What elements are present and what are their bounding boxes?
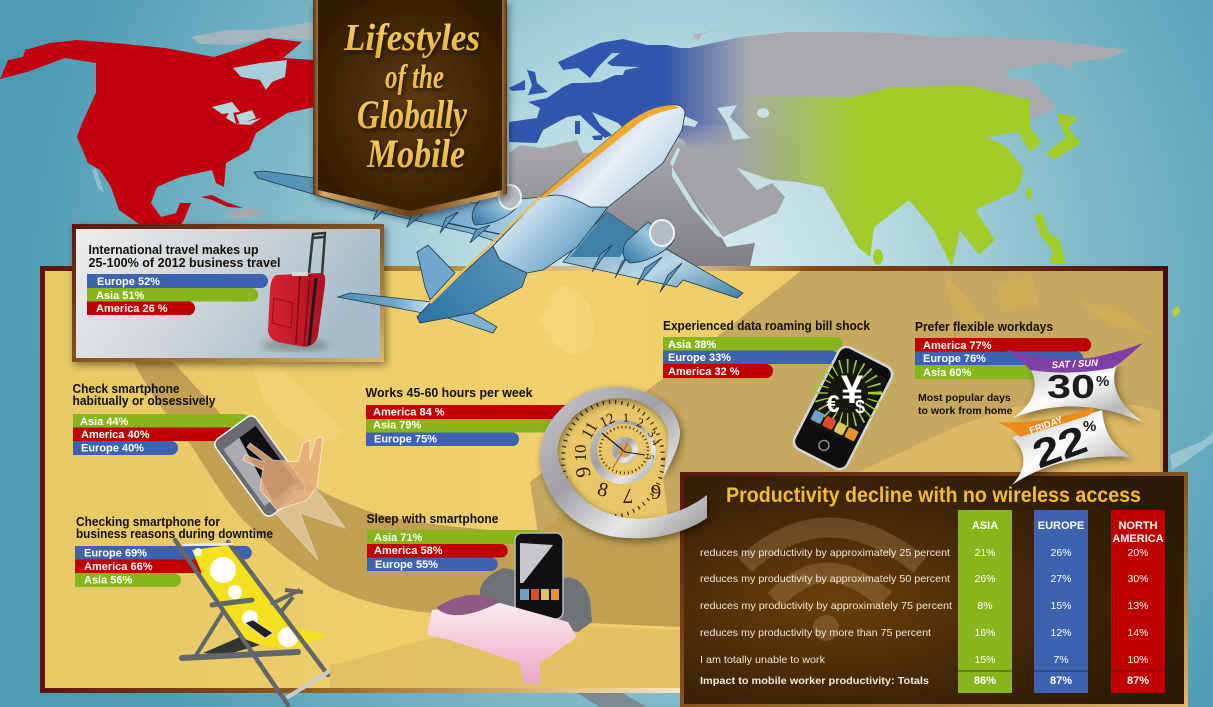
heading: habitually or obsessively xyxy=(72,393,216,408)
bar: Europe 55% xyxy=(367,558,498,571)
illustration: airplane xyxy=(254,105,743,333)
forearm xyxy=(275,490,345,560)
right tailplane xyxy=(445,313,497,333)
currency symbols: ¥ xyxy=(841,368,864,412)
row labels: reduces my productivity by more than 75 percent xyxy=(700,628,931,639)
bar: America 66%: America 66% xyxy=(84,561,153,573)
bar: Europe 76% xyxy=(915,352,1083,365)
map: Cuba xyxy=(201,195,243,208)
bar: Asia 44% xyxy=(73,414,250,428)
bar: America 32%: America 32 % xyxy=(668,366,740,378)
text: most popular days: to work from home xyxy=(918,405,1013,417)
heading block: check smartphone xyxy=(72,381,250,455)
bar: Europe 69% xyxy=(75,546,252,560)
title text: Mobile xyxy=(366,131,465,176)
heading block: prefer flexible workdays xyxy=(915,319,1091,417)
bar: Europe 33% xyxy=(663,350,838,364)
heading: Checking smartphone for xyxy=(76,514,220,529)
heading block: checking during downtime xyxy=(75,514,273,587)
panel: main gold area xyxy=(40,266,1168,693)
bar: America 58%: America 58% xyxy=(374,545,443,557)
bar: Asia 51%: Asia 51% xyxy=(96,290,145,302)
column: North America: NORTH xyxy=(1118,520,1158,532)
map: British Isles xyxy=(509,70,548,95)
chair shadow xyxy=(203,637,260,655)
ribbon label: FRIDAY xyxy=(1028,414,1065,437)
column: Asia: 86% xyxy=(974,675,996,687)
ribbon label: SAT / SUN xyxy=(1051,358,1099,371)
clock numerals: 8 xyxy=(595,478,610,502)
bar: Asia 79%: Asia 79% xyxy=(373,420,422,432)
column: Europe: 87% xyxy=(1050,675,1072,687)
map: Asia green region xyxy=(738,85,1042,267)
value: 30% xyxy=(1047,368,1109,405)
chair fabric xyxy=(192,545,328,648)
row labels: reduces my productivity by approximately 25 percent xyxy=(700,548,950,559)
clock numerals: 4 xyxy=(649,437,662,448)
bar: Asia 60%: Asia 60% xyxy=(923,367,972,379)
box background xyxy=(76,229,380,358)
mid fuselage xyxy=(493,195,608,273)
clock numerals xyxy=(570,410,662,508)
bar: Europe 40%: Europe 40% xyxy=(81,442,144,454)
map: Gulf of California xyxy=(92,168,104,193)
smartphone xyxy=(212,413,308,519)
map: New Zealand xyxy=(1172,305,1180,318)
clock numerals: 3 xyxy=(645,426,659,440)
column: North America xyxy=(1111,510,1165,693)
sweeping shadow band xyxy=(134,362,680,627)
illustration: smartphone with hand xyxy=(212,413,345,560)
bar: America 84%: America 84 % xyxy=(373,406,445,418)
column: Asia: 16% xyxy=(974,627,996,639)
bar: America 26%: America 26 % xyxy=(96,303,168,315)
heading: Works 45-60 hours per week xyxy=(366,385,533,400)
bar: Europe 55%: Europe 55% xyxy=(375,559,438,571)
title banner xyxy=(313,0,507,217)
value: 30%: % xyxy=(1096,373,1109,390)
banner frame xyxy=(313,0,507,217)
clock numerals: 2 xyxy=(635,414,646,431)
column: North America: AMERICA xyxy=(1112,533,1164,545)
column: North America: 20% xyxy=(1127,547,1149,559)
left tailplane xyxy=(338,293,432,313)
box frame xyxy=(72,224,384,362)
forward fuselage xyxy=(540,105,685,207)
clock hands xyxy=(602,433,645,468)
map: Africa xyxy=(509,140,755,266)
chair struts behind fabric xyxy=(263,590,303,622)
clock numerals: 12 xyxy=(597,410,618,431)
clock numerals: 6 xyxy=(651,480,661,504)
clock numerals: 9 xyxy=(570,465,596,479)
bar: Asia 56%: Asia 56% xyxy=(84,574,133,586)
heading: international travel xyxy=(88,242,280,270)
faded silhouette lower right xyxy=(330,625,680,690)
lit wedge xyxy=(858,395,1160,472)
bar: Asia 60% xyxy=(915,365,1040,379)
upright smartphone xyxy=(515,533,563,619)
currency rays xyxy=(821,366,875,420)
column: Europe: EUROPE xyxy=(1038,520,1084,532)
bar: Asia 71% xyxy=(367,530,543,544)
column: Asia xyxy=(958,510,1012,693)
bar: America 32% xyxy=(663,364,773,378)
heading: Check smartphone xyxy=(72,381,180,396)
left wing xyxy=(254,171,563,247)
illustration: bed with phone xyxy=(427,533,592,685)
title text xyxy=(343,17,480,176)
icon: wifi watermark xyxy=(745,528,920,641)
bar: Europe 75%: Europe 75% xyxy=(374,434,437,446)
world map xyxy=(0,22,1213,470)
bar: America 77%: America 77% xyxy=(923,340,992,352)
map: Mediterranean islands xyxy=(575,121,603,140)
banner: Friday 22% xyxy=(997,407,1133,485)
banner fill xyxy=(318,0,502,211)
fabric flowers xyxy=(194,548,298,647)
bar: Asia 38% xyxy=(663,337,843,351)
clock face xyxy=(558,398,668,524)
bar: Europe 33%: Europe 33% xyxy=(668,352,731,364)
illustration: deck chair xyxy=(175,540,328,705)
bar: Asia 71%: Asia 71% xyxy=(374,532,423,544)
illustration: phone with currencies xyxy=(791,344,895,472)
faded Africa silhouette xyxy=(540,285,594,355)
banner sheet xyxy=(1013,364,1143,422)
row labels: reduces my productivity by approximately 50 percent xyxy=(700,574,950,585)
map: Great Lakes xyxy=(212,102,262,125)
bar: Asia 56% xyxy=(75,573,181,587)
shaded globe wedge xyxy=(530,271,1164,540)
column: Europe: 12% xyxy=(1050,627,1072,639)
column: Asia: 26% xyxy=(974,573,996,585)
heading: Experienced data roaming bill shock xyxy=(663,318,871,333)
heading: business reasons during downtime xyxy=(76,526,273,541)
column: Asia: 21% xyxy=(974,547,996,559)
bar: Asia 79% xyxy=(366,419,562,432)
map: Japan xyxy=(1047,113,1081,160)
row labels: reduces my productivity by approximately 75 percent xyxy=(700,601,952,612)
row labels: Impact to mobile worker productivity: Totals xyxy=(700,675,929,687)
panel frame xyxy=(680,472,1188,707)
inner ticks xyxy=(600,427,648,473)
right wing fairings xyxy=(592,245,682,292)
value: 30%: 30 xyxy=(1047,368,1095,405)
title text: of the xyxy=(385,59,444,96)
illustration: spiral clock xyxy=(540,387,707,538)
heading: international travel: International travel makes up xyxy=(88,242,259,257)
currency symbols: € xyxy=(826,391,840,418)
panel background xyxy=(684,476,1184,704)
map: Arctic island xyxy=(693,28,727,41)
clock numerals: 10 xyxy=(571,444,590,462)
faded Indonesia xyxy=(945,272,1155,335)
bar: Asia 38%: Asia 38% xyxy=(668,339,717,351)
column: Asia: ASIA xyxy=(972,520,998,532)
map: Arabian Peninsula xyxy=(672,150,785,237)
inner face xyxy=(597,424,651,476)
hand xyxy=(243,437,345,560)
column: North America: 13% xyxy=(1127,600,1149,612)
left wing fairings xyxy=(373,205,490,243)
bar: America 84% xyxy=(366,405,583,419)
gold stripe xyxy=(430,105,680,303)
inner swirl xyxy=(612,437,638,463)
banner: Sat/Sun 30% xyxy=(1005,343,1143,422)
tail fin xyxy=(417,245,455,300)
bar: America 77% xyxy=(915,338,1091,352)
column: North America: 30% xyxy=(1127,573,1149,585)
heading: productivity decline: Productivity decline with no wireless access xyxy=(726,484,1141,507)
clock numerals: 7 xyxy=(623,484,633,508)
row labels xyxy=(700,548,952,687)
bar: America 58% xyxy=(367,544,508,558)
chair phone xyxy=(245,620,273,638)
column: North America: 87% xyxy=(1127,675,1149,687)
bar: America 40%: America 40% xyxy=(81,429,150,441)
heading xyxy=(76,514,273,541)
map: Middle East fade xyxy=(660,125,800,182)
column: Asia: 8% xyxy=(977,600,993,612)
column: Europe: 15% xyxy=(1050,600,1072,612)
minute ticks xyxy=(563,402,663,516)
column: Europe: 27% xyxy=(1050,573,1072,585)
row labels: I am totally unable to work xyxy=(700,655,826,666)
heading: Sleep with smartphone xyxy=(366,511,498,526)
banner sheet xyxy=(1012,410,1133,485)
heading block: data roaming bill shock xyxy=(663,318,871,378)
panel border xyxy=(40,266,1168,693)
orange ribbon xyxy=(997,407,1093,437)
map: Greenland xyxy=(191,22,314,45)
silver spiral xyxy=(540,387,707,538)
map: faded southern islands xyxy=(1170,432,1213,470)
title text: Lifestyles xyxy=(343,17,480,59)
bar: America 66% xyxy=(75,560,243,573)
map: Taiwan, Sri Lanka and Philippines xyxy=(873,187,1066,265)
value: 22%: 22 xyxy=(1027,418,1093,477)
map: Eurasia xyxy=(509,32,1128,267)
pink bed xyxy=(427,603,583,685)
heading: international travel: 25-100% of 2012 business travel xyxy=(88,255,280,270)
column: Europe xyxy=(1034,510,1088,693)
palm and fingers xyxy=(243,437,323,510)
purple ribbon xyxy=(1005,343,1143,373)
column: Europe: 26% xyxy=(1050,547,1072,559)
right wing dark root xyxy=(570,212,638,257)
purple pillow xyxy=(437,595,500,615)
clock numerals: 1 xyxy=(623,410,629,425)
column: North America: 14% xyxy=(1127,627,1149,639)
heading xyxy=(72,381,216,408)
clock numerals: 11 xyxy=(577,418,602,442)
panel: productivity decline xyxy=(680,472,1188,707)
column: North America: 10% xyxy=(1127,654,1149,666)
bottom shadow band xyxy=(577,693,647,707)
right engine xyxy=(623,220,674,263)
text: most popular days: Most popular days xyxy=(918,392,1011,404)
bar: Europe 52%: Europe 52% xyxy=(97,276,160,288)
left engine xyxy=(472,185,521,225)
percent sign: % xyxy=(1083,418,1096,435)
heading block: works 45-60 hours xyxy=(366,385,583,446)
icon: red suitcase xyxy=(261,233,329,351)
bar: Europe 69%: Europe 69% xyxy=(84,548,147,560)
panel: international travel xyxy=(72,224,384,362)
map: North America xyxy=(0,38,330,226)
bar: America 40% xyxy=(73,428,237,441)
bar: Europe 75% xyxy=(366,432,519,446)
bar: Europe 76%: Europe 76% xyxy=(923,353,986,365)
map: Caribbean islands xyxy=(225,208,268,218)
bar: Europe 40% xyxy=(73,441,178,455)
column: Asia: 15% xyxy=(974,654,996,666)
right wing xyxy=(563,212,743,298)
faded continent xyxy=(250,360,345,442)
panel background xyxy=(44,270,1164,689)
swirl centre xyxy=(618,443,632,457)
heading block: sleep with smartphone xyxy=(366,511,543,571)
grey cloud xyxy=(480,568,592,632)
map: inland seas xyxy=(672,105,772,238)
chair frame xyxy=(175,540,328,705)
bar: Asia 44%: Asia 44% xyxy=(80,416,129,428)
column: Europe: 7% xyxy=(1053,654,1069,666)
phone body xyxy=(791,344,895,472)
app icons xyxy=(800,410,859,461)
text: most popular days xyxy=(918,392,1013,417)
currency symbols xyxy=(826,368,865,418)
heading: Prefer flexible workdays xyxy=(915,319,1053,334)
rear fuselage xyxy=(417,246,527,323)
map: Hudson Bay xyxy=(233,60,287,90)
bar: America 26% xyxy=(87,302,195,315)
bar: Asia 51% xyxy=(87,288,258,302)
clock numerals: 5 xyxy=(645,455,655,460)
title text: Globally xyxy=(357,92,467,137)
inner ring xyxy=(590,420,656,484)
left wing flap line xyxy=(447,223,513,237)
bar: Europe 52% xyxy=(87,274,268,288)
currency symbols: $ xyxy=(855,397,865,417)
